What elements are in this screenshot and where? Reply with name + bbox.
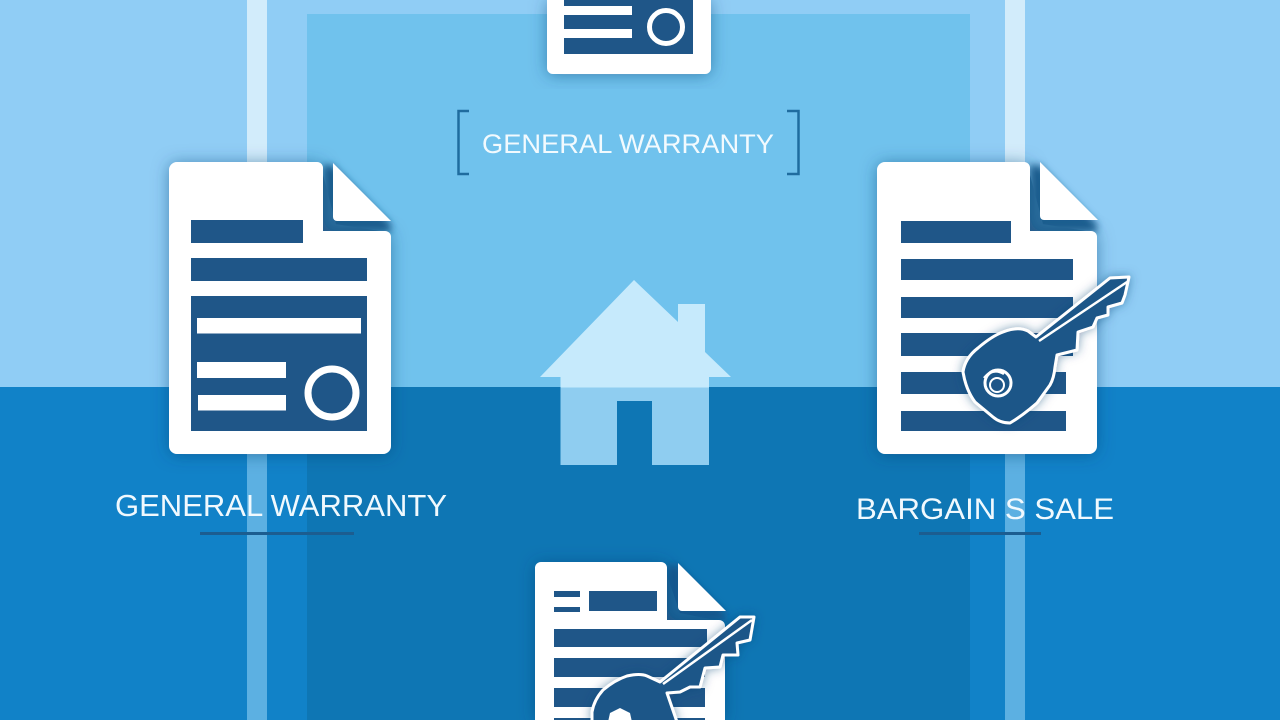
left document: general warranty <box>169 162 391 454</box>
icon: key <box>592 617 754 720</box>
background lower <box>0 387 1280 720</box>
top document <box>547 0 711 74</box>
bracketed heading <box>458 111 798 174</box>
background upper <box>0 0 1280 387</box>
right document: bargain and sale <box>877 162 1129 454</box>
icon: key <box>963 277 1129 423</box>
center panel upper <box>307 14 970 387</box>
left label: GENERAL WARRANTY <box>115 488 447 523</box>
left vertical stripe <box>247 0 267 720</box>
house icon <box>540 280 731 465</box>
center panel lower <box>307 387 970 720</box>
bottom document <box>535 562 754 720</box>
right vertical stripe <box>1005 0 1025 720</box>
bracketed heading: GENERAL WARRANTY <box>482 129 774 159</box>
right label: BARGAIN S SALE <box>856 493 1114 526</box>
